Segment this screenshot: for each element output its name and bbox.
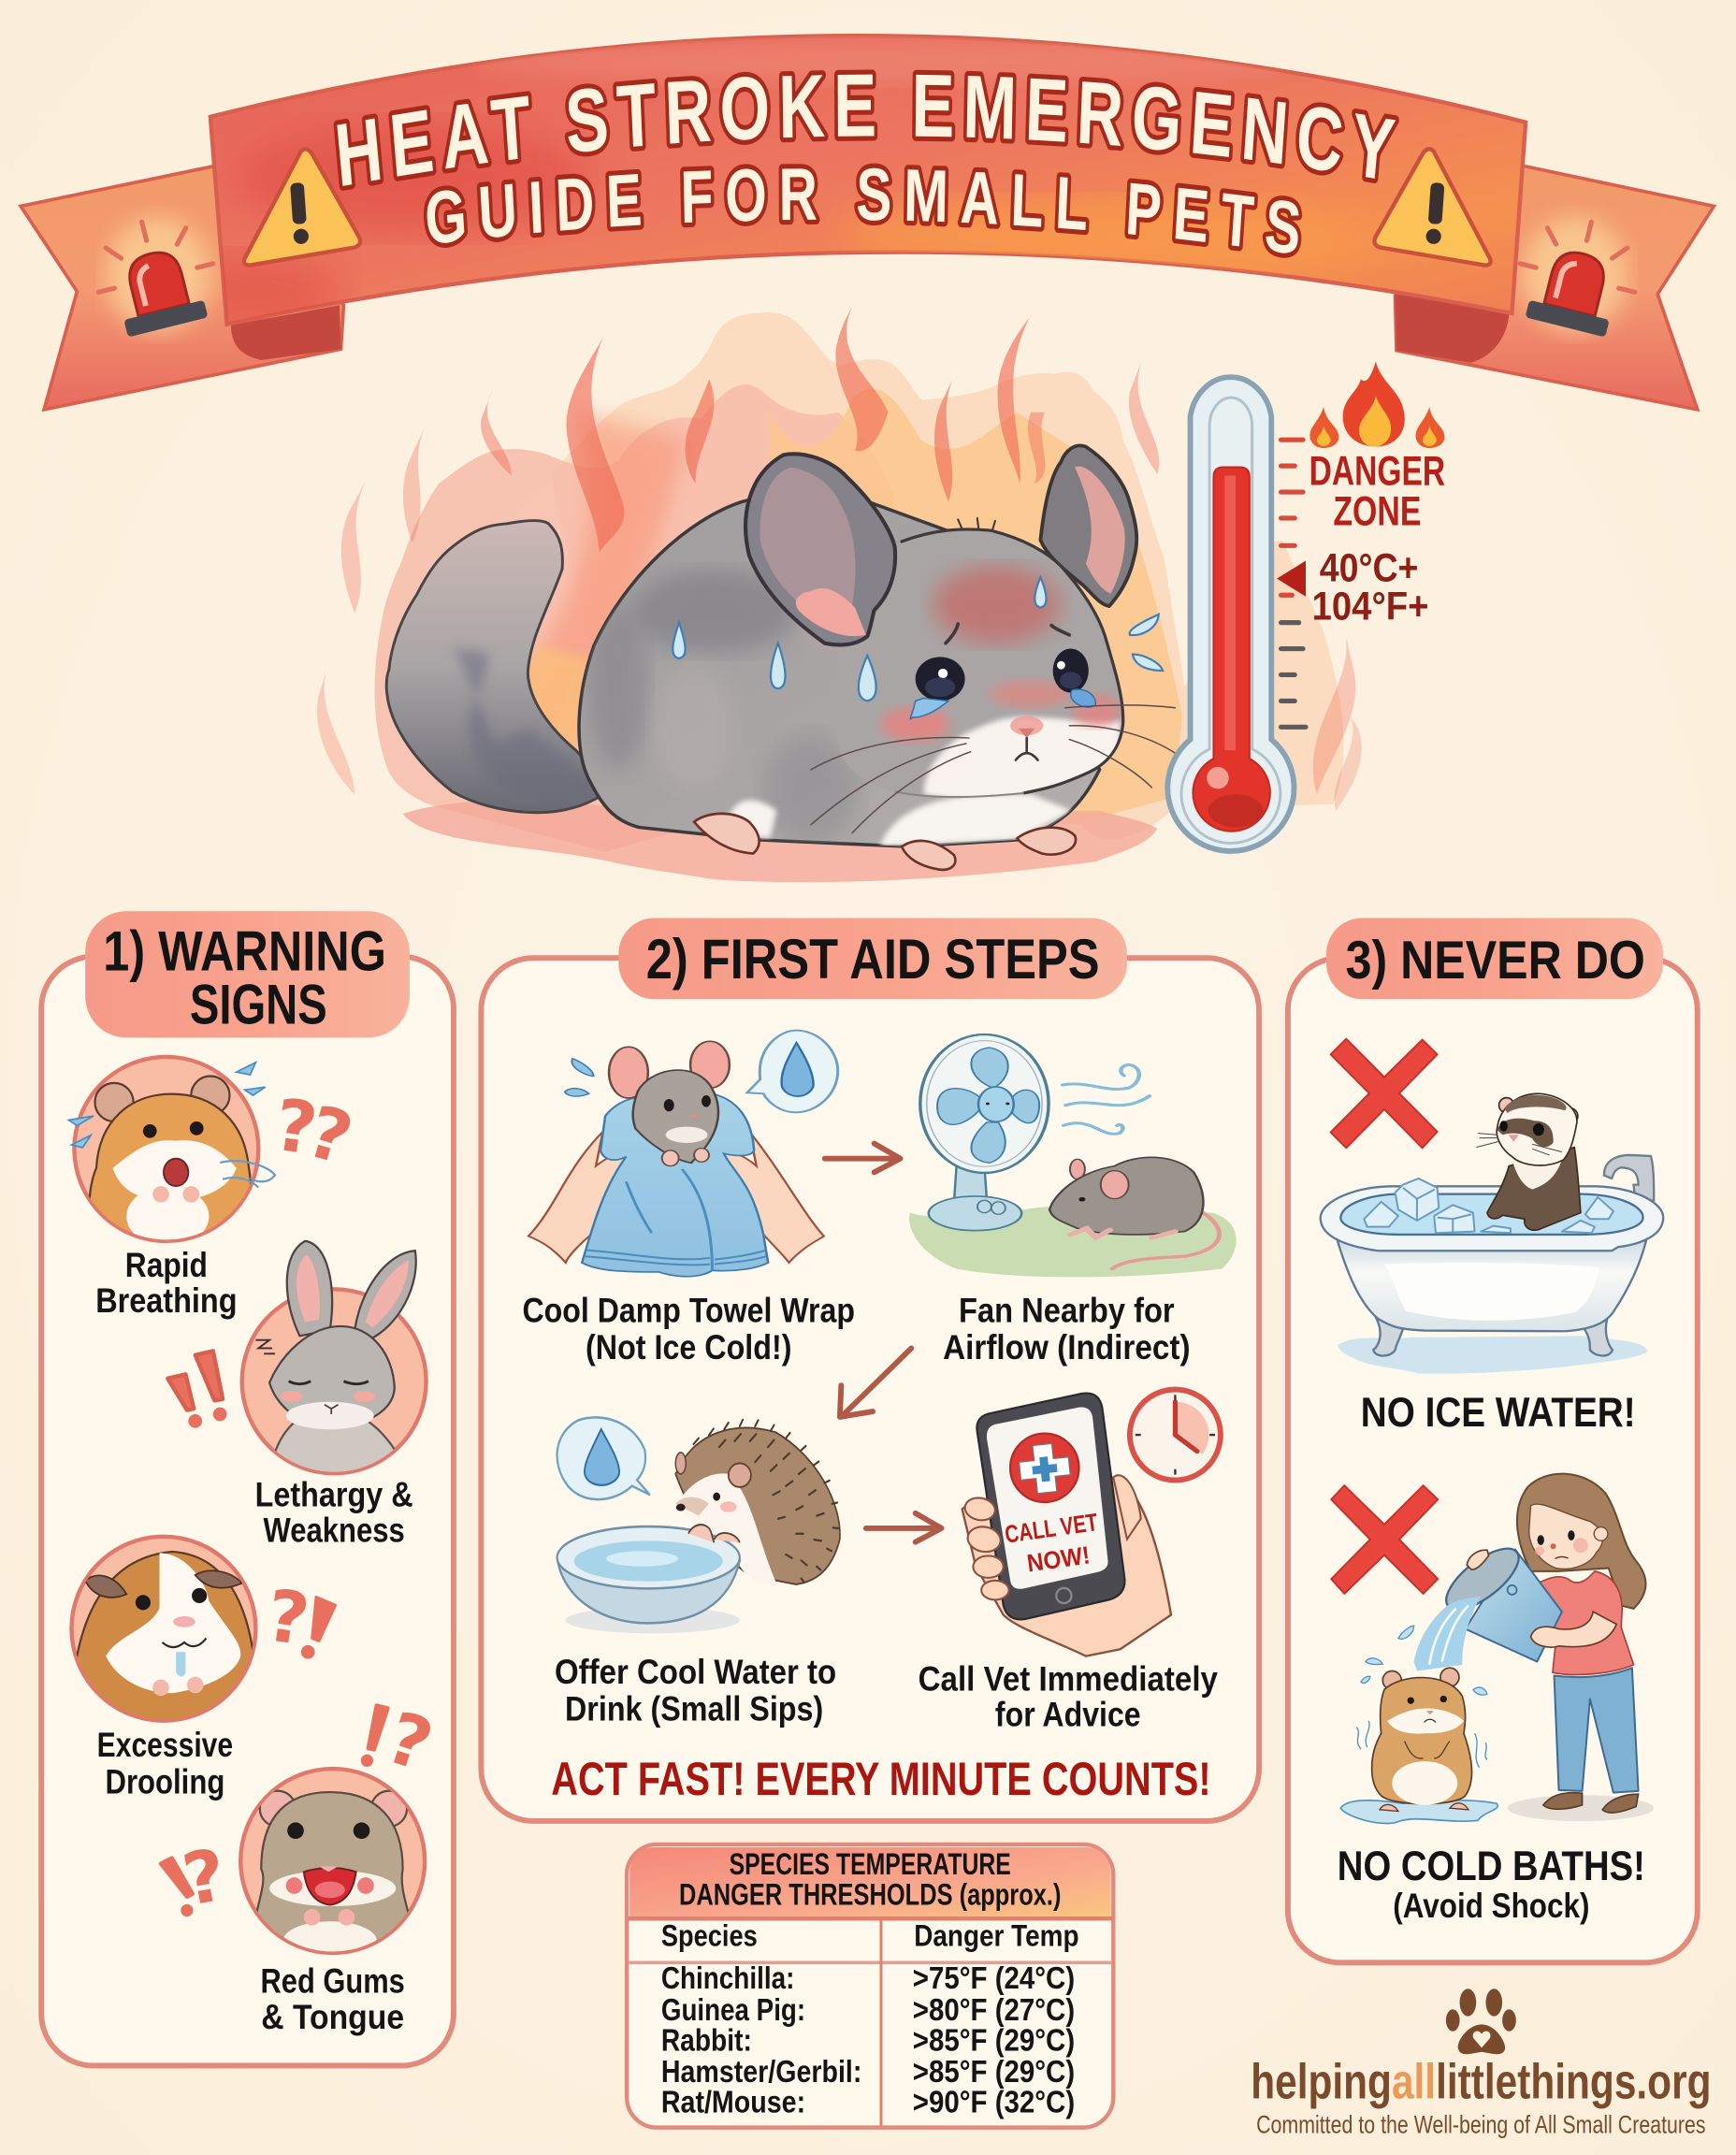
panel: first aid steps: Call Vet Immediately [919,1659,1218,1698]
hands [528,1132,630,1263]
siren glow left [106,217,210,333]
title text [333,69,1399,258]
marks: question marks [269,1084,361,1182]
species rows [661,1960,861,2119]
callout: act fast: ACT FAST! EVERY MINUTE COUNTS! [551,1753,1211,1805]
red mercury column [1194,468,1270,832]
tub rim [1321,1186,1663,1251]
table frame [627,1844,1113,2128]
eyebrows [946,624,1069,644]
faucet [1604,1155,1654,1202]
salmon left flame [375,384,893,852]
heading text: SIGNS [190,973,327,1036]
panel: warning signs [41,911,454,2065]
marks: exclamation and question left: ? [177,1833,232,1923]
eyes [916,657,965,701]
puddle [1338,1336,1648,1374]
icon: warning triangle left [244,149,360,266]
icon: red X [1331,1039,1438,1148]
heading pill [1326,918,1663,999]
head colour washes [881,566,1121,802]
label [255,1475,413,1550]
tears [910,698,948,719]
icon: flames [1309,361,1444,448]
hand [962,1478,1171,1656]
water stream [1414,1597,1481,1671]
label [95,1246,238,1320]
heat wisps [317,307,1362,811]
column headings [661,1919,1079,1953]
marks: exclamation [167,1351,227,1428]
red cross badge [1010,1434,1079,1502]
body [579,492,1100,846]
step: fan and rat [909,1034,1237,1277]
sign: rapid breathing hamster [69,1057,275,1247]
towel [582,1094,768,1277]
tub white panel [1384,1263,1599,1321]
paws [688,1525,740,1542]
temperature rows: >75°F (24°C) [913,1960,1075,1996]
feet [694,814,760,853]
head outline [902,529,1123,793]
shadow [1508,1795,1654,1821]
step labels row two: Drink (Small Sips) [565,1690,823,1728]
thermometer [1167,377,1306,851]
column headings: Danger Temp [914,1919,1079,1953]
icon: siren left [84,208,225,341]
tick marks [1281,440,1303,595]
species rows: Chinchilla: [661,1960,794,1996]
label: NO COLD BATHS! [1338,1844,1645,1889]
wind lines [1063,1064,1150,1134]
step: call vet phone [962,1390,1221,1656]
panel: first aid steps [481,918,1259,1821]
danger zone text: DANGER [1309,449,1445,495]
title banner [18,34,1717,412]
label: Drooling [105,1763,224,1801]
head fill [832,529,1123,797]
shirt [1527,1571,1634,1674]
label: NO ICE WATER! [1361,1390,1636,1436]
table title [679,1847,1061,1912]
hair [1517,1474,1646,1609]
phone text: NOW! [1025,1540,1092,1578]
column headings: Species [661,1919,758,1953]
temperature rows: >90°F (32°C) [913,2084,1075,2119]
arrow [840,1348,911,1417]
shoes [1543,1793,1639,1813]
tube and bulb [1167,377,1295,851]
ear left [745,454,895,644]
illustration: overheated chinchilla [386,445,1175,870]
green ground [909,1207,1237,1277]
outer peach flame [550,312,1343,840]
marks: question and exclamation: ? [262,1574,314,1663]
bucket [1466,1550,1562,1662]
panel frame [41,957,454,2065]
orange mid flame [770,388,1182,825]
heading text: 1) WARNING [103,918,386,982]
panel: first aid steps: Fan Nearby for [959,1292,1175,1330]
danger zone callout: ZONE [1333,488,1421,534]
panel: never do [1288,918,1698,1962]
nose and mouth [1010,716,1043,735]
left banner tail [21,165,343,410]
sign: lethargy rabbit [242,1241,427,1478]
icon: warning triangle right [1374,149,1491,266]
danger zone callout: 104°F+ [1312,585,1429,629]
species rows: Rat/Mouse: [661,2084,805,2119]
label: Weakness [263,1511,405,1550]
ground shadow [403,801,1157,882]
step labels row two: Offer Cool Water to [555,1653,836,1691]
step labels row one [522,1292,855,1367]
arrow [825,1144,901,1172]
tail markings [454,646,598,800]
heading text: 3) NEVER DO [1346,931,1645,991]
sweat drops [673,577,1163,701]
bath water [1340,1194,1643,1235]
temperature rows: >80°F (27°C) [913,1992,1075,2028]
species rows: Guinea Pig: [661,1992,805,2028]
icon: red X [1331,1485,1438,1594]
label: Lethargy & [255,1475,413,1513]
step: cool water and hedgehog [557,1417,840,1633]
phone body [976,1394,1124,1619]
title text: HEAT STROKE EMERGENCY [333,69,1399,191]
sign: red gums gerbil [240,1769,425,1960]
rat [1070,1159,1085,1179]
heading text [103,918,386,1036]
heading pill [618,918,1127,999]
heat flames background [317,307,1362,882]
label: Rapid [125,1246,208,1284]
arrow marker [1277,561,1306,597]
speech bubble [747,1031,838,1112]
sign: drooling guinea pig [71,1537,256,1734]
hamster [1382,1671,1401,1690]
ferret [1487,1148,1581,1230]
right banner tail [1396,165,1714,410]
label: & Tongue [261,1998,404,2036]
label: Breathing [95,1281,238,1320]
main banner ribbon [210,36,1526,325]
danger zone callout [1277,361,1445,629]
fan base [954,1166,987,1200]
marks: question marks: ? [298,1091,361,1182]
speech bubble [557,1417,650,1499]
temperature text: 40°C+ [1320,546,1418,591]
banner watercolor blotches [179,40,1361,337]
step labels row two [555,1653,836,1728]
jeans [1555,1668,1639,1792]
phone text [1003,1508,1104,1580]
temperature rows: >85°F (29°C) [913,2054,1075,2090]
ice cubes [1364,1179,1613,1233]
table: species temperature danger thresholds [627,1844,1113,2128]
chin fold line [895,791,1024,797]
tub body [1338,1241,1646,1331]
panel frame [481,958,1259,1821]
icon: clock [1130,1390,1221,1481]
illustration: ferret in ice bath with red X [1321,1039,1663,1374]
table title: DANGER THRESHOLDS (approx.) [679,1878,1061,1912]
whiskers [811,705,1175,832]
hedgehog [675,1428,840,1584]
banner folds [231,305,340,360]
ear right [1040,445,1136,606]
sublabel: (Avoid Shock) [1393,1887,1589,1925]
temperature rows [913,1960,1075,2119]
marks: exclamation and question top: ? [377,1697,441,1788]
panel: first aid steps: Airflow (Indirect) [943,1328,1191,1367]
fan head [920,1034,1049,1173]
body watercolor patches [588,550,1072,846]
heading pill [85,911,410,1037]
table header band [629,1847,1110,1918]
species rows: Hamster/Gerbil: [661,2054,861,2090]
splash drops [1361,1626,1487,1695]
label: Excessive [97,1726,233,1764]
panel frame [1288,958,1698,1962]
hands and arm [1467,1550,1489,1569]
temperature rows: >85°F (29°C) [913,2022,1075,2058]
icon: paw [1446,1989,1516,2054]
table title: SPECIES TEMPERATURE [730,1847,1011,1881]
head fur tuft [958,518,995,530]
arrow [866,1513,942,1542]
step labels row one: (Not Ice Cold!) [586,1328,791,1367]
siren glow right [1523,217,1628,333]
fingers [963,1475,1141,1599]
step labels row one: Cool Damp Towel Wrap [522,1292,855,1330]
title text: GUIDE FOR SMALL PETS [424,163,1302,258]
tub feet [1373,1319,1613,1355]
marks: question marks: ? [269,1084,322,1172]
label [261,1962,405,2036]
puddle [1340,1801,1497,1823]
heading text: 2) FIRST AID STEPS [646,927,1100,991]
label [97,1726,233,1801]
tail [386,521,603,813]
face [1529,1504,1602,1569]
mouse [609,1047,648,1098]
logo: helpingalllittlethings.org [1251,1989,1711,2138]
illustration: girl pouring water on hamster with red X [1331,1474,1654,1823]
step: towel wrap [528,1031,838,1277]
icon: siren right [1508,208,1649,341]
species rows: Rabbit: [661,2022,752,2058]
phone text: CALL VET [1003,1508,1100,1549]
bowl [565,1607,740,1633]
panel: first aid steps: for Advice [995,1696,1141,1734]
sweat drops [565,1059,594,1096]
label: Red Gums [261,1962,405,2001]
